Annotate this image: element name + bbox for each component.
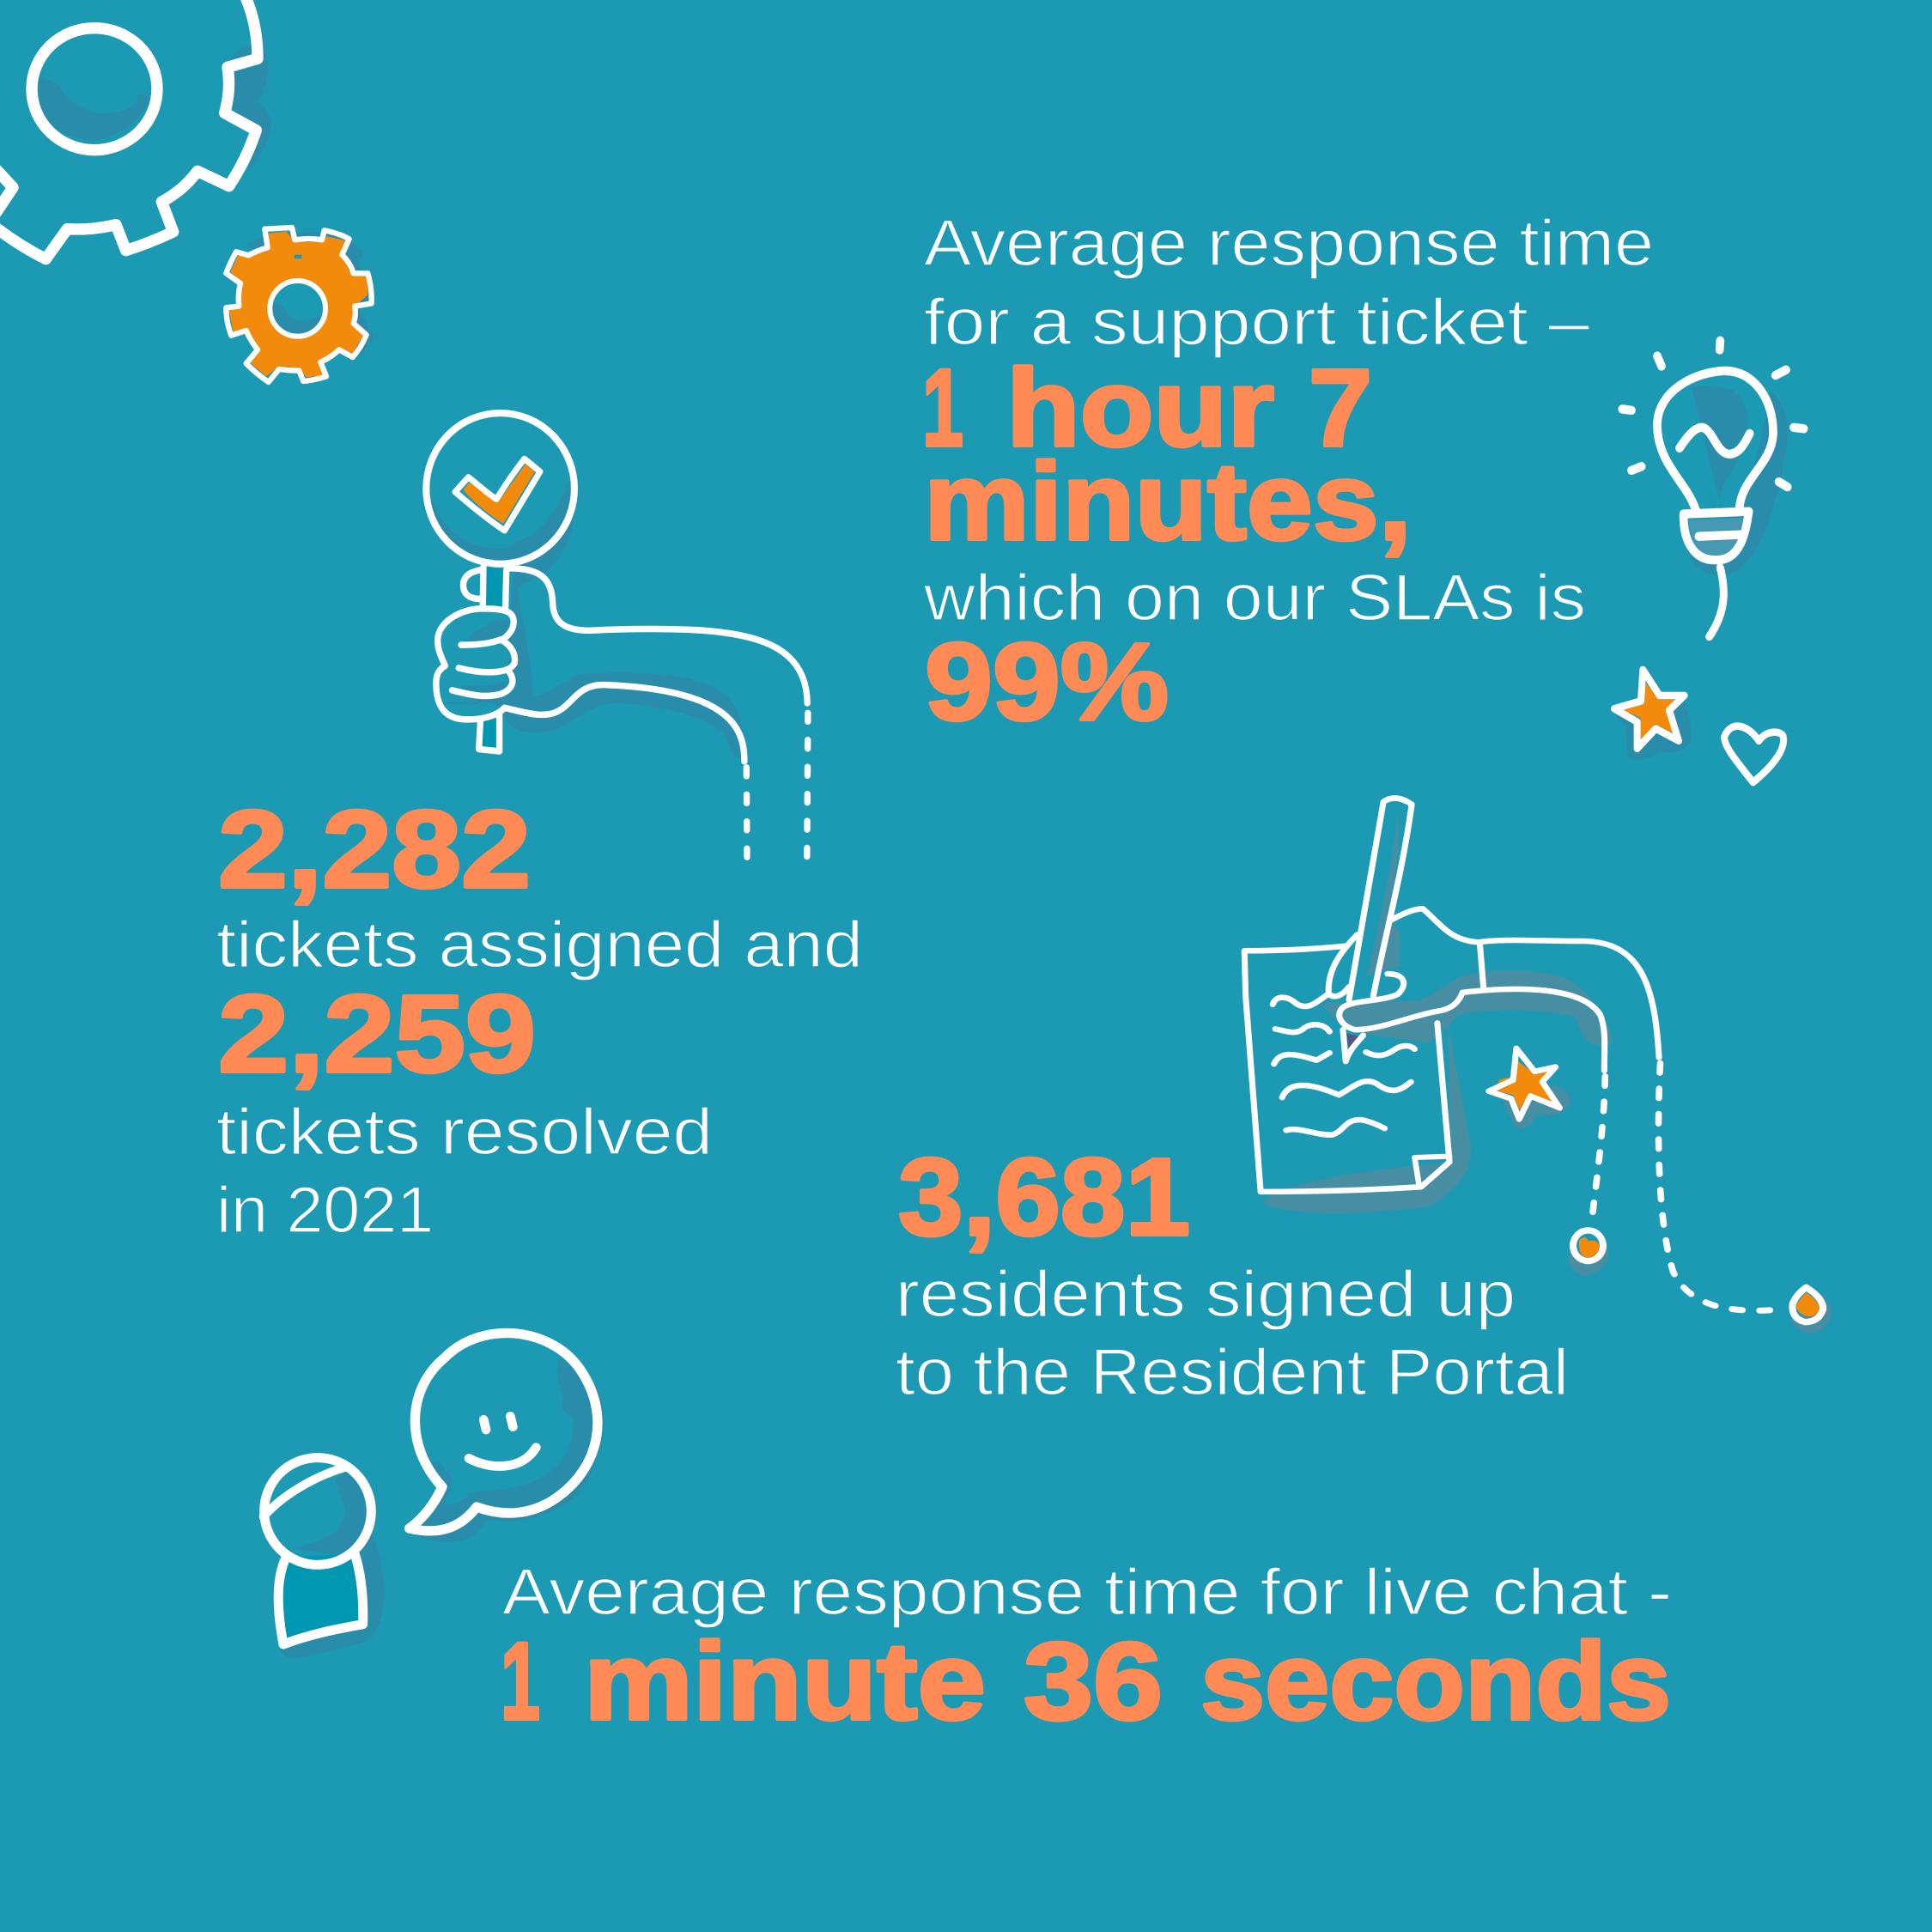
dashed lines [807, 713, 808, 856]
resident portal text [896, 1136, 1569, 1409]
tickets text: tickets assigned and [216, 908, 863, 981]
bubble shadow [412, 1357, 604, 1542]
live chat text: Average response time for live chat - [502, 1556, 1672, 1629]
heading text: support ticket response time: for a support ticket – [924, 286, 1590, 359]
bubble [410, 1334, 598, 1531]
live chat text: seconds [1200, 1620, 1671, 1743]
icon: star and path end dots [1489, 1048, 1832, 1334]
heading text: support ticket response time: minutes, [924, 440, 1412, 563]
icon: person with speech bubble [264, 1334, 604, 1659]
tickets text [216, 788, 863, 1247]
tickets text: 2,282 [218, 788, 531, 911]
heading text: support ticket response time: 99% [925, 621, 1169, 744]
live chat text: 1 [501, 1620, 540, 1743]
live chat text [501, 1556, 1672, 1743]
person shadow [279, 1471, 385, 1659]
tickets text: 2,259 [218, 973, 536, 1096]
tick [463, 464, 535, 524]
heading text: support ticket response time: 1 [922, 347, 963, 470]
heading text: support ticket response time: which on our SLAs is [923, 562, 1586, 635]
heading text: support ticket response time: hour [1006, 347, 1274, 470]
resident portal text: to the Resident Portal [896, 1336, 1569, 1409]
stick [483, 567, 507, 608]
live chat text: 36 [1024, 1620, 1163, 1743]
shadows [1262, 1026, 1471, 1213]
sign circle [426, 413, 574, 564]
writing lines [1273, 994, 1414, 1135]
icon: hand writing on paper [1244, 798, 1787, 1310]
heading text: support ticket response time: Average response time [924, 207, 1654, 280]
smiley [483, 1416, 513, 1430]
icon: heart [1724, 726, 1783, 782]
icon: small orange gear [226, 228, 375, 382]
tickets text: tickets resolved [216, 1096, 713, 1169]
icon: hand holding a tick sign [426, 413, 808, 858]
icon: large gear [0, 0, 271, 259]
resident portal text: residents signed up [896, 1258, 1516, 1331]
head [264, 1458, 371, 1564]
hand and arm [1392, 908, 1659, 1058]
resident portal text: 3,681 [898, 1136, 1190, 1259]
icon: orange star [1614, 670, 1691, 760]
paper [1244, 946, 1449, 1192]
heading text: support ticket response time: 7 [1309, 347, 1372, 470]
dashed lines [1592, 1076, 1605, 1218]
live chat text: minute [584, 1620, 986, 1743]
icon: light bulb [1622, 341, 1804, 636]
pen [1343, 798, 1412, 1061]
body [278, 1554, 363, 1644]
fist and arm outline [463, 570, 482, 598]
sign shadow [429, 475, 745, 760]
tickets text: in 2021 [216, 1174, 434, 1247]
heading text: support ticket response time [922, 207, 1654, 744]
